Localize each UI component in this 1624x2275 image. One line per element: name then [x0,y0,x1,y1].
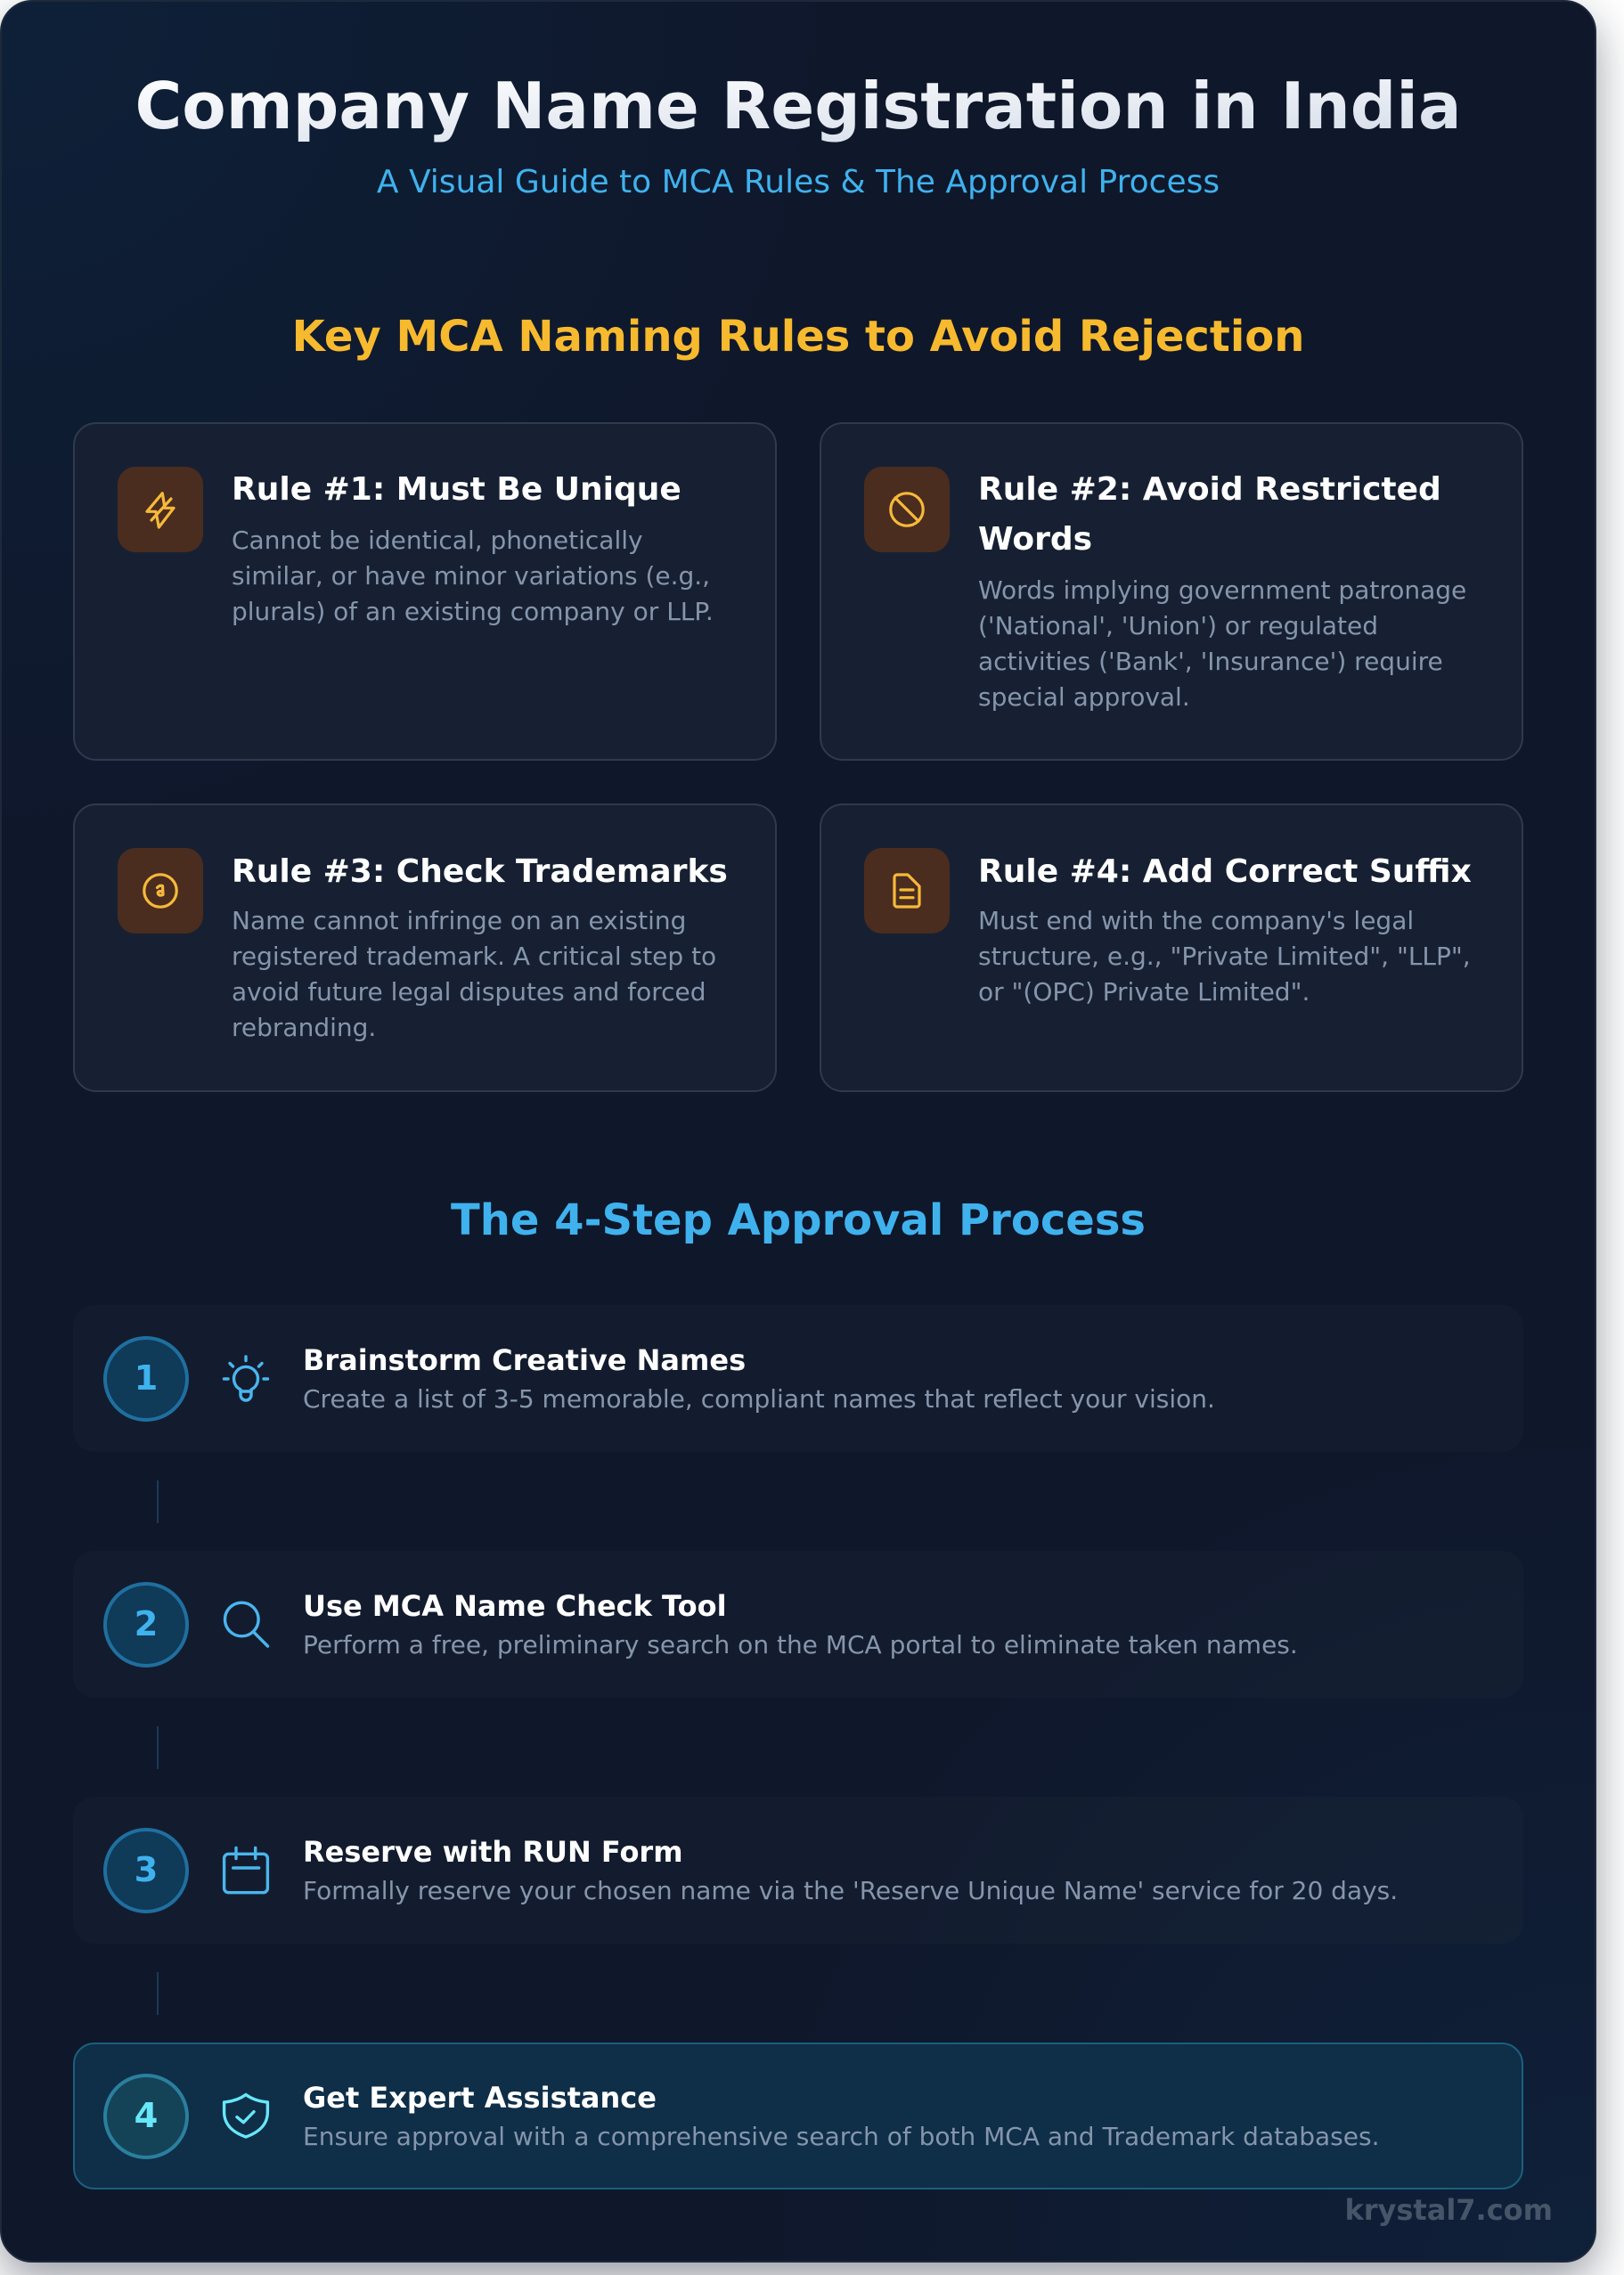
step 3 number [103,1828,189,1913]
rule 2 title: Words [978,521,1092,558]
rule 4 title: Rule #4: Add Correct Suffix [978,853,1472,890]
rule 4 description: or "(OPC) Private Limited". [978,977,1310,1007]
step 4 number [103,2074,189,2159]
step 3 number: 3 [135,1850,158,1890]
rule 2 description: ('National', 'Union') or regulated [978,611,1378,640]
panel: step 4 row [73,2043,1523,2189]
panel: step 2 row [73,1551,1523,1698]
rule 3 description: rebranding. [232,1013,376,1042]
icon: calendar [223,1846,269,1894]
rule 2 description [978,575,1466,712]
rule 1 description [232,526,714,626]
step 2 number: 2 [135,1604,158,1644]
rule 2 title: Rule #2: Avoid Restricted [978,471,1441,508]
panel: rule 2 [820,422,1523,761]
step 2 description: Perform a free, preliminary search on the MCA portal to eliminate taken names. [303,1630,1298,1659]
rule 2 description: activities ('Bank', 'Insurance') require [978,647,1443,676]
rule 2 title [978,471,1441,558]
title: Company Name Registration in India [135,69,1462,143]
rule 1 description: Cannot be identical, phonetically [232,526,643,555]
icon: trademark circle [118,848,203,934]
rule 3 description: Name cannot infringe on an existing [232,906,686,935]
step 1 description: Create a list of 3-5 memorable, compliant names that reflect your vision. [303,1384,1215,1414]
icon: lightning bolts [118,467,203,552]
rule 4 description: structure, e.g., "Private Limited", "LLP", [978,942,1471,971]
step 1 number [103,1336,189,1422]
rule 3 title: Rule #3: Check Trademarks [232,853,728,890]
rule 1 title: Rule #1: Must Be Unique [232,471,681,508]
step 3 description: Formally reserve your chosen name via the 'Reserve Unique Name' service for 20 days. [303,1876,1398,1905]
icon: lightbulb [223,1355,269,1402]
step 4 number: 4 [135,2096,158,2136]
rule 3 description: avoid future legal disputes and forced [232,977,706,1007]
rule 1 description: similar, or have minor variations (e.g., [232,561,710,591]
rule 4 description [978,906,1471,1007]
heading: approval process: The 4-Step Approval Process [451,1195,1146,1245]
icon: document [864,848,950,934]
rule 3 description [232,906,716,1042]
panel: rule 1 [73,422,777,761]
icon: magnifying glass [223,1602,269,1648]
rule 1 description: plurals) of an existing company or LLP. [232,597,714,626]
step 2 title: Use MCA Name Check Tool [303,1589,727,1623]
step 3 title: Reserve with RUN Form [303,1835,683,1869]
icon: shield with check [223,2093,269,2139]
rule 4 description: Must end with the company's legal [978,906,1414,935]
step 1 number: 1 [135,1358,158,1398]
rule 3 description: registered trademark. A critical step to [232,942,716,971]
rule 2 description: Words implying government patronage [978,575,1466,605]
rule 2 description: special approval. [978,682,1190,712]
watermark: krystal7.com [1344,2193,1553,2227]
step 2 number [103,1582,189,1668]
panel: rule 4 [820,803,1523,1092]
heading: naming rules: Key MCA Naming Rules to Avoid Rejection [292,312,1304,362]
panel: step 3 row [73,1797,1523,1944]
subtitle: A Visual Guide to MCA Rules & The Approval Process [377,164,1220,200]
icon: prohibited sign [864,467,950,552]
step 4 description: Ensure approval with a comprehensive search of both MCA and Trademark databases. [303,2122,1379,2151]
step 1 title: Brainstorm Creative Names [303,1343,746,1377]
step 4 title: Get Expert Assistance [303,2081,657,2115]
panel: rule 3 [73,803,777,1092]
panel: step 1 row [73,1305,1523,1452]
